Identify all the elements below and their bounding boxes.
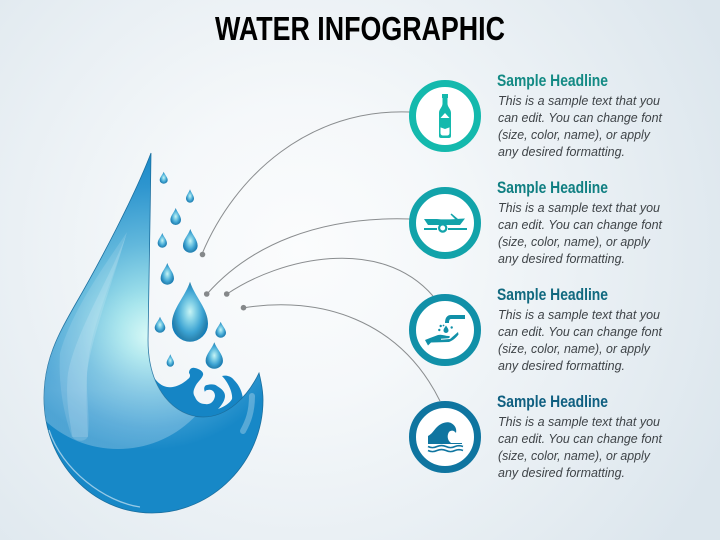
item 1 text: (size, color, name), or apply <box>498 127 651 142</box>
icon ring: boat <box>412 190 478 256</box>
item 1: bottle <box>412 84 478 148</box>
item 2 text: any desired formatting. <box>498 251 625 266</box>
item 4 text: This is a sample text that you <box>498 414 660 429</box>
item 3 text: any desired formatting. <box>498 358 625 373</box>
icon: ocean wave <box>428 422 463 452</box>
item 1 text <box>497 71 663 159</box>
connector lines <box>200 112 440 401</box>
title: WATER INFOGRAPHIC <box>215 10 505 47</box>
item 4 text: any desired formatting. <box>498 465 625 480</box>
icon: bottle <box>439 94 451 138</box>
item 3 text: (size, color, name), or apply <box>498 341 651 356</box>
item 1 text: any desired formatting. <box>498 144 625 159</box>
item 3 text <box>497 285 663 373</box>
item 1 text: Sample Headline <box>497 71 608 90</box>
item 3 text: This is a sample text that you <box>498 307 660 322</box>
item 2 text: can edit. You can change font <box>498 217 663 232</box>
item 1 text: This is a sample text that you <box>498 93 660 108</box>
icon ring: bottle <box>412 84 478 148</box>
icon ring: tap <box>412 298 478 362</box>
item 2 text: Sample Headline <box>497 178 608 197</box>
icon ring: wave <box>412 404 478 470</box>
icon: tap over hand <box>425 315 465 346</box>
item 2: boat <box>412 190 478 256</box>
item 4 text: can edit. You can change font <box>498 431 663 446</box>
item 4 text: (size, color, name), or apply <box>498 448 651 463</box>
item 3 text: can edit. You can change font <box>498 324 663 339</box>
item 1 text: can edit. You can change font <box>498 110 663 125</box>
item 4 text <box>497 392 663 480</box>
item 2 text: This is a sample text that you <box>498 200 660 215</box>
item 3: tap and hand <box>412 298 478 362</box>
item 3 text: Sample Headline <box>497 285 608 304</box>
item 4: wave <box>412 404 478 470</box>
small droplets <box>155 172 226 369</box>
item 4 text: Sample Headline <box>497 392 608 411</box>
icon: boat on trailer <box>424 214 467 232</box>
item 2 text <box>497 178 663 266</box>
main water drop <box>44 152 264 514</box>
wave inside the drop <box>151 368 243 420</box>
item 2 text: (size, color, name), or apply <box>498 234 651 249</box>
